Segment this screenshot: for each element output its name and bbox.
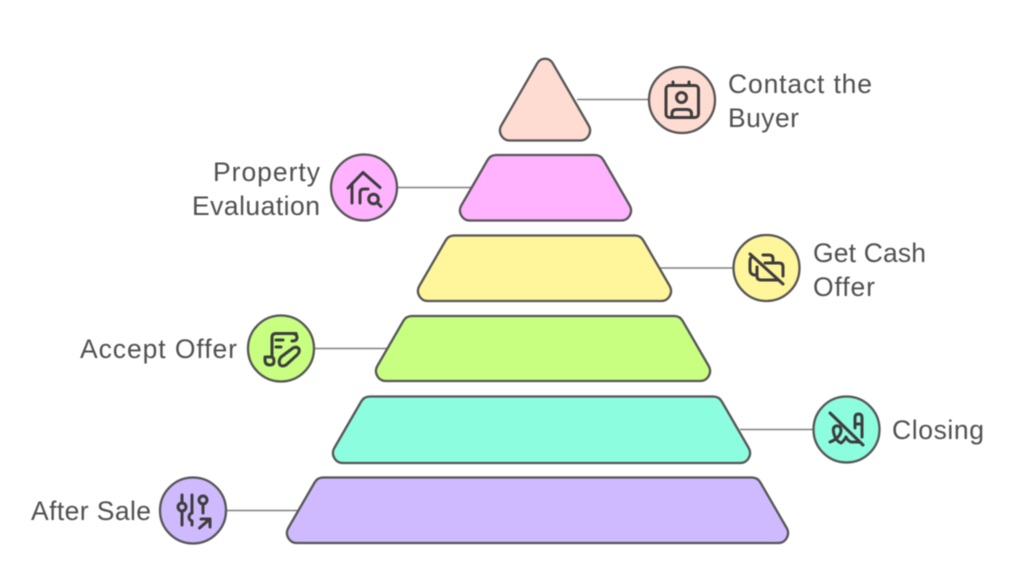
pyramid tier shape: peach triangle — [500, 59, 590, 141]
tier: After Sale — [31, 477, 788, 544]
label: Get Cash Offer: Get Cash — [813, 238, 926, 268]
pyramid tier shape: yellow trapezoid — [418, 235, 671, 301]
connector: Closing — [740, 428, 814, 430]
label: Contact the Buyer — [728, 69, 872, 133]
pyramid tier shape: teal trapezoid — [333, 396, 750, 463]
tier: Property Evaluation — [192, 154, 631, 221]
tier: Accept Offer — [80, 316, 710, 382]
pyramid tier shape: pink trapezoid — [460, 155, 631, 221]
connector: Contact the Buyer — [577, 98, 649, 100]
label: Contact the Buyer: Contact the — [728, 69, 872, 99]
label: Property Evaluation — [192, 157, 321, 221]
icon: scroll and pen — [248, 316, 314, 382]
pyramid tier shape: purple trapezoid — [287, 477, 788, 543]
icon: crossed-out signature — [814, 396, 880, 462]
label: After Sale: After Sale — [31, 496, 151, 526]
icon: crossed-out wallets — [734, 235, 800, 301]
icon: contact card — [649, 67, 715, 133]
label: Property Evaluation: Evaluation — [192, 191, 320, 221]
icon: sliders with arrow — [160, 478, 226, 544]
label: Property Evaluation: Property — [213, 157, 321, 187]
label: Contact the Buyer: Buyer — [728, 103, 799, 133]
label: Get Cash Offer — [813, 238, 926, 302]
tier: Contact the Buyer — [500, 59, 872, 141]
connector: Get Cash Offer — [660, 267, 734, 269]
icon: house search — [331, 154, 397, 220]
connector: After Sale — [226, 510, 300, 512]
connector: Property Evaluation — [396, 186, 472, 188]
label: Get Cash Offer: Offer — [813, 272, 875, 302]
label: Closing: Closing — [892, 415, 984, 445]
pyramid tier shape: green trapezoid — [376, 316, 710, 381]
connector: Accept Offer — [313, 348, 390, 350]
label: Accept Offer: Accept Offer — [80, 334, 237, 364]
tier: Get Cash Offer — [418, 235, 926, 302]
tier: Closing — [333, 396, 984, 463]
